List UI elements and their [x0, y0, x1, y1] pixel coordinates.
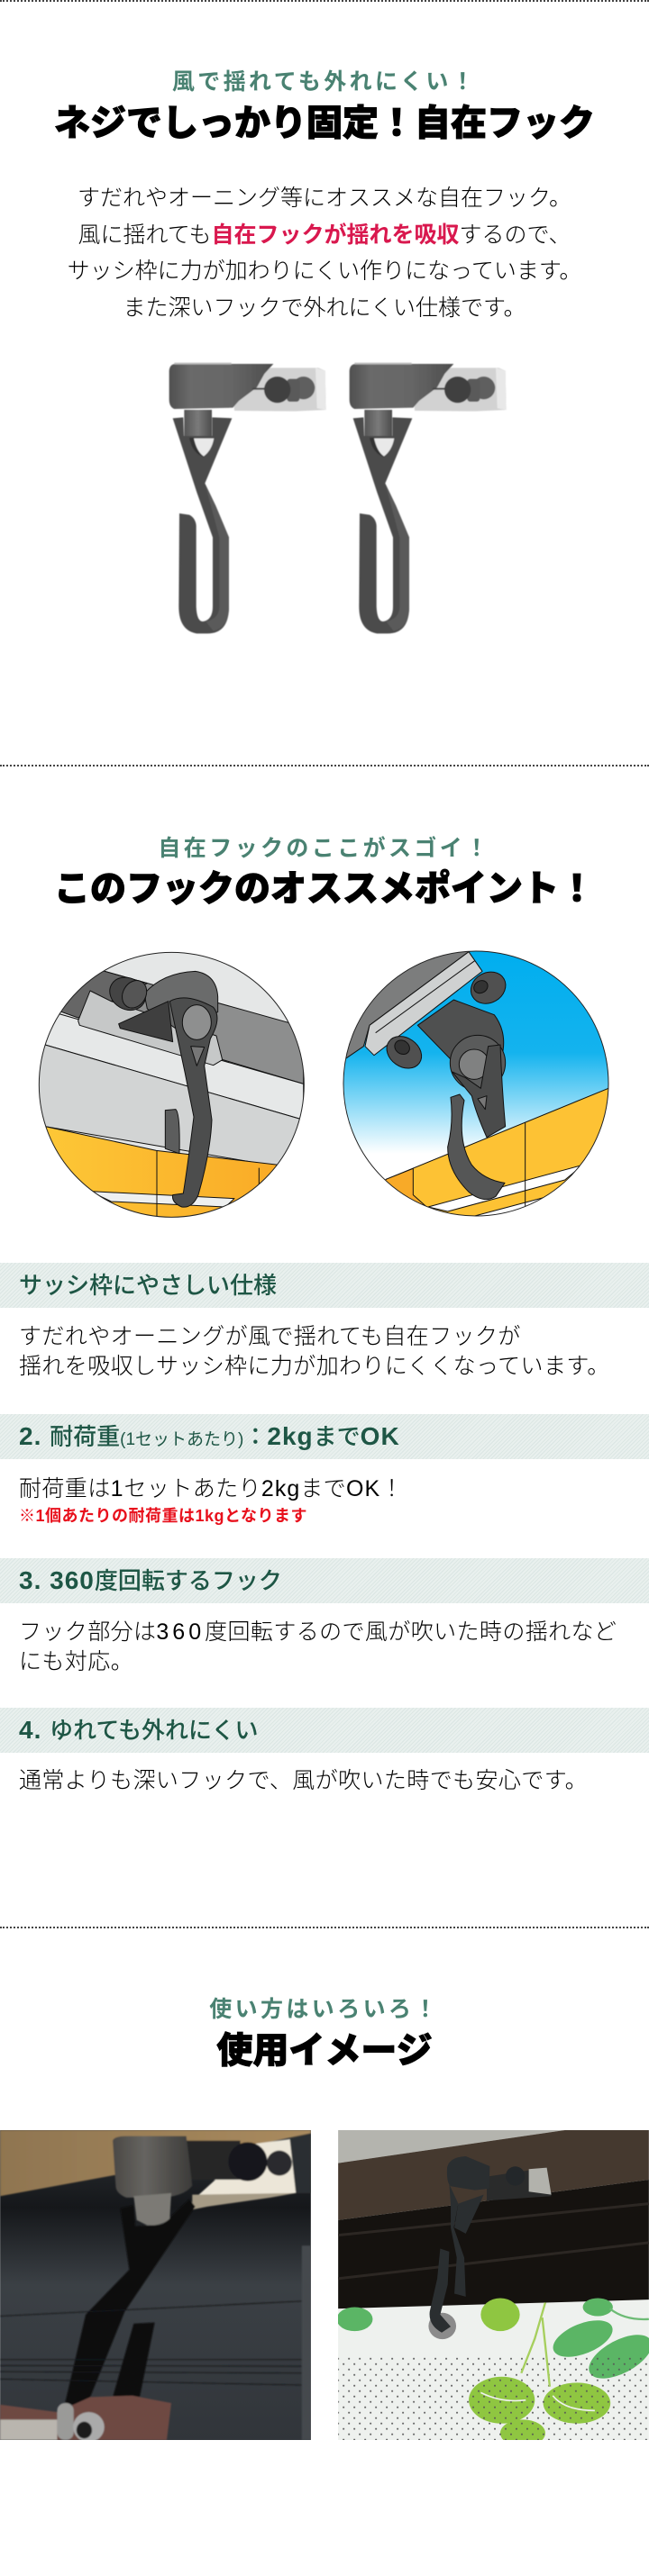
- photo: hook holding leaf-pattern awning: [338, 2130, 649, 2440]
- text block: point 3: にも対応。: [19, 1649, 133, 1674]
- icon: right hook: [350, 363, 507, 633]
- title: section 3: 使用イメージ: [216, 2031, 433, 2071]
- subheading: section 1: 風で揺れても外れにくい！: [172, 69, 477, 95]
- note: load per hook: ※1個あたりの耐荷重は1kgとなります: [19, 1507, 307, 1525]
- text block: intro: [68, 186, 581, 321]
- panel: point 4 heading: 4. ゆれても外れにくい: [19, 1716, 259, 1744]
- photo: hook on dark sash: [0, 2130, 311, 2440]
- text block: point 3: フック部分は360度回転するので風が吹いた時の揺れなど: [19, 1619, 617, 1645]
- subheading: section 3: 使い方はいろいろ！: [209, 1997, 440, 2022]
- section divider: lower: [0, 1927, 649, 1928]
- text block: intro: すだれやオーニング等にオススメな自在フック。: [78, 186, 571, 211]
- text block: point 2: 耐荷重は1セットあたり2kgまでOK！: [19, 1476, 404, 1501]
- product images: two hooks: [168, 362, 507, 634]
- title: section 1: ネジでしっかり固定！自在フック: [54, 104, 595, 143]
- panel: point 1 heading: サッシ枠にやさしい仕様: [19, 1272, 277, 1299]
- illustration: hook from front: [38, 951, 305, 1218]
- text block: point 4: 通常よりも深いフックで、風が吹いた時でも安心です。: [19, 1768, 588, 1793]
- text block: point 1: 揺れを吸収しサッシ枠に力が加わりにくくなっています。: [19, 1354, 610, 1379]
- text block: point 1: [19, 1324, 610, 1379]
- text block: intro: サッシ枠に力が加わりにくい作りになっています。: [68, 259, 581, 284]
- panel: point 4 heading: [0, 1708, 649, 1753]
- subheading: section 2: 自在フックのここがスゴイ！: [158, 836, 491, 861]
- text block: intro: また深いフックで外れにくい仕様です。: [123, 295, 526, 321]
- illustration: hook from below: [343, 951, 609, 1216]
- panel: point 2 heading: [0, 1414, 649, 1459]
- panel: point 3 heading: [0, 1558, 649, 1603]
- panel: point 3 heading: 3. 360度回転するフック: [19, 1566, 282, 1594]
- title: section 2: このフックのオススメポイント！: [54, 869, 595, 909]
- section divider: top: [0, 0, 649, 2]
- panel: point 1 heading: [0, 1263, 649, 1308]
- section divider: middle: [0, 765, 649, 766]
- text block: intro: 風に揺れても自在フックが揺れを吸収するので、: [78, 222, 571, 247]
- panel: point 2 heading: 2. 耐荷重(1セットあたり)：2kgまでOK: [19, 1422, 400, 1450]
- text block: point 3: [19, 1619, 617, 1674]
- text block: point 1: すだれやオーニングが風で揺れても自在フックが: [19, 1324, 521, 1349]
- icon: left hook: [169, 363, 326, 633]
